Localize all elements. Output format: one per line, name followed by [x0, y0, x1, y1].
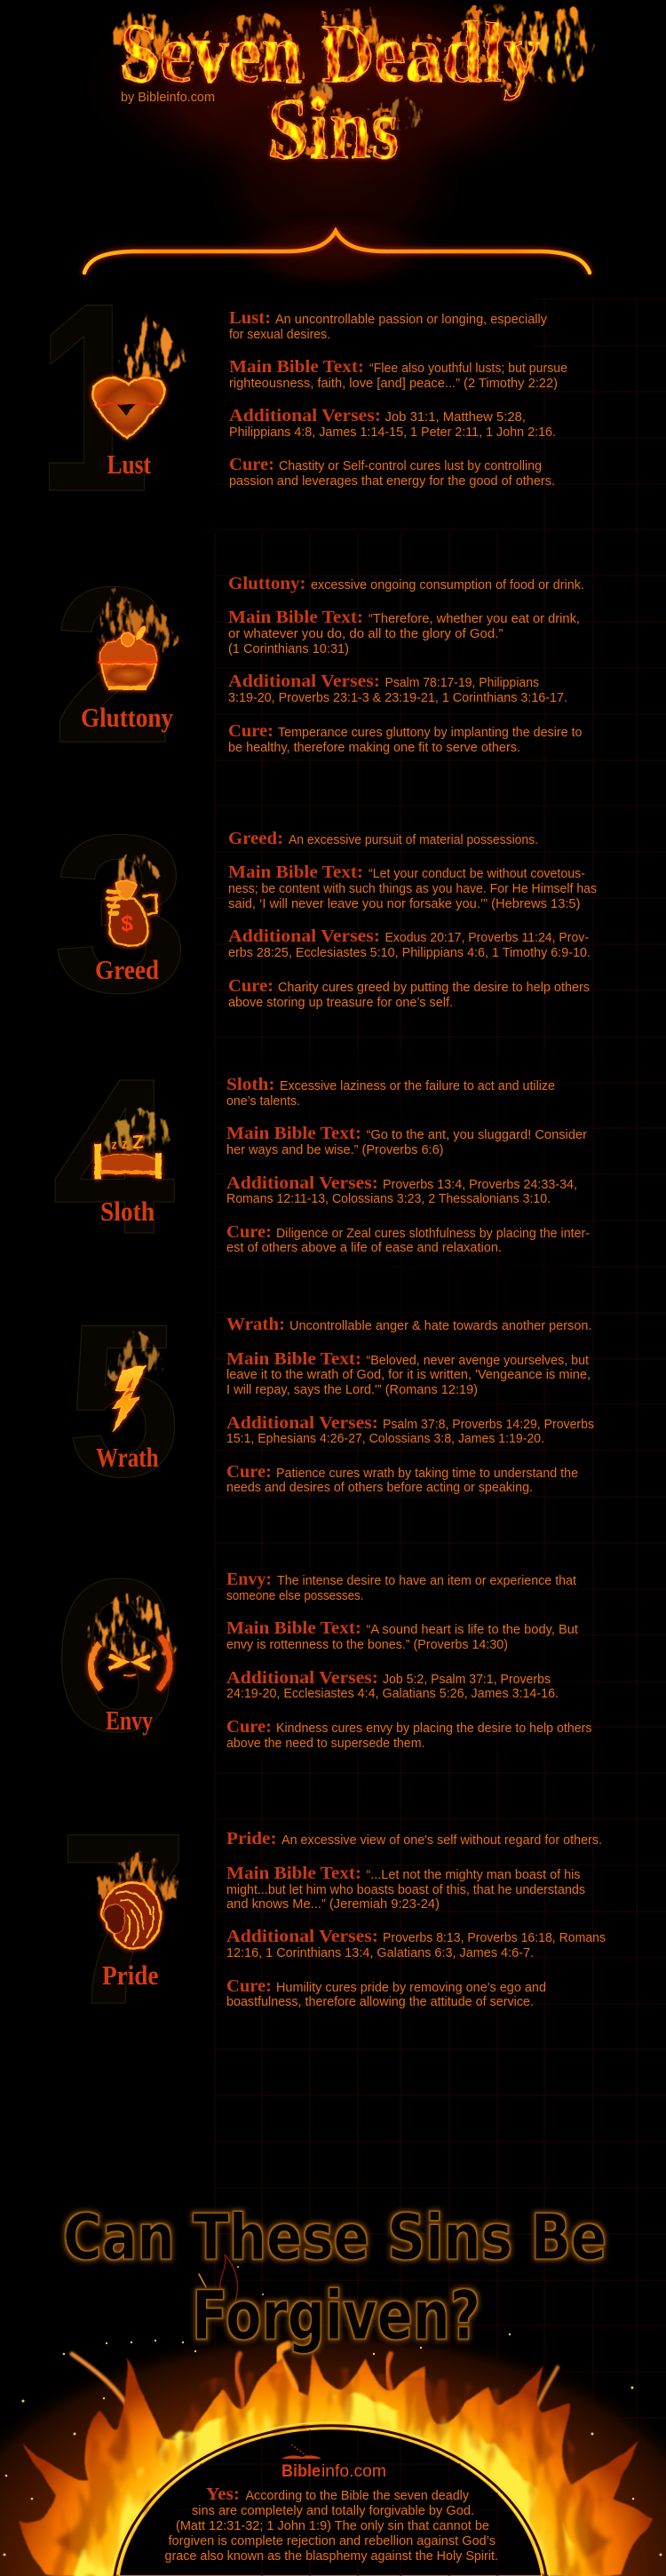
- icon: flaming bed: z: [122, 1137, 128, 1152]
- title line 2: Sins: [267, 79, 400, 178]
- panel: lust: [36, 247, 567, 548]
- panel: envy: [53, 1534, 592, 1777]
- text block: main bible text: Main Bible Text:: [229, 357, 364, 377]
- number 6: 6: [53, 1534, 178, 1777]
- text block: additional verses: Job 5:2, Psalm 37:1, Proverbs: [383, 1672, 551, 1687]
- logo: Bibleinfo.com: info.com: [321, 2462, 386, 2481]
- text block: additional verses: Exodus 20:17, Proverbs 11:24, Prov-: [385, 930, 589, 945]
- text block: definition: Pride:: [226, 1829, 277, 1849]
- text block: definition: [226, 1570, 577, 1603]
- panel: gluttony: [52, 540, 584, 789]
- title: Seven Deadly Sins: [114, 4, 591, 178]
- heading: Can These Sins Be Forgiven?: [63, 2201, 607, 2355]
- number 3: 3: [52, 789, 189, 1039]
- text block: additional verses: [226, 1173, 577, 1206]
- text block: answer: According to the Bible the seven deadly: [245, 2488, 469, 2503]
- text block: cure: be healthy, therefore making one fit to serve others.: [228, 740, 520, 755]
- text block: main bible text: and knows Me...” (Jeremiah 9:23-24): [226, 1896, 440, 1912]
- text block: answer: sins are completely and totally forgivable by God.: [192, 2503, 474, 2518]
- text block: additional verses: 3:19-20, Proverbs 23:1-3 & 23:19-21, 1 Corinthians 3:16-17.: [228, 690, 567, 705]
- panel: pride: [58, 1784, 606, 2055]
- text block: main bible text: [226, 1618, 579, 1652]
- text block: additional verses: Additional Verses:: [228, 926, 380, 946]
- text block: additional verses: [226, 1927, 606, 1960]
- text block: additional verses: Psalm 78:17-19, Philippians: [385, 675, 539, 690]
- text block: main bible text: “Let your conduct be without covetous-: [369, 866, 585, 881]
- text block: additional verses: Romans 12:11-13, Colossians 3:23, 2 Thessalonians 3:10.: [226, 1191, 551, 1206]
- text block: cure: Cure:: [226, 1976, 272, 1996]
- text block: definition: [228, 829, 538, 848]
- text block: cure: Charity cures greed by putting the desire to help others: [278, 980, 590, 995]
- text block: main bible text: her ways and be wise.” (Proverbs 6:6): [226, 1142, 444, 1157]
- number 5: 5: [67, 1279, 180, 1523]
- icon: flaming bed: [94, 1101, 170, 1179]
- text block: definition: someone else possesses.: [226, 1588, 364, 1603]
- flame wisps above the arch: [72, 2254, 558, 2425]
- icon: flaming cupcake: [99, 588, 176, 690]
- text block: answer: (Matt 12:31-32; 1 John 1:9) The only sin that cannot be: [176, 2518, 489, 2533]
- text block: definition: Uncontrollable anger & hate towards another person.: [289, 1318, 591, 1333]
- sin name: Pride: [102, 1960, 158, 1991]
- text block: definition: [226, 1315, 591, 1334]
- text block: main bible text: Main Bible Text:: [226, 1349, 361, 1369]
- title line 1: Seven Deadly: [119, 5, 540, 101]
- icon: flaming money bag: [108, 848, 162, 945]
- number 1: 1: [36, 247, 150, 548]
- text block: definition: Lust:: [229, 308, 271, 328]
- text block: main bible text: said, ‘I will never leave you nor forsake you.’” (Hebrews 13:5): [228, 896, 581, 911]
- text block: answer: forgiven is complete rejection and rebellion against God’s: [169, 2533, 496, 2548]
- byline: by Bibleinfo.com: [121, 90, 215, 105]
- text block: main bible text: [226, 1864, 585, 1912]
- text block: definition: one’s talents.: [226, 1093, 300, 1109]
- text block: additional verses: [226, 1413, 594, 1446]
- text block: main bible text: Main Bible Text:: [228, 863, 363, 882]
- panel: wrath: [67, 1279, 594, 1523]
- logo: Bibleinfo.com: [281, 2445, 386, 2481]
- text block: definition: Greed:: [228, 829, 283, 848]
- text block: definition: An excessive pursuit of material possessions.: [289, 832, 538, 847]
- sin name: Wrath: [96, 1442, 158, 1473]
- text block: additional verses: 12:16, 1 Corinthians 13:4, Galatians 6:3, James 4:6-7.: [226, 1945, 534, 1960]
- text block: main bible text: “Beloved, never avenge yourselves, but: [366, 1353, 590, 1368]
- icon: flaming lightning bolt: [107, 1332, 166, 1432]
- sin name: Gluttony: [81, 702, 173, 733]
- text block: definition: Gluttony:: [228, 574, 305, 593]
- text block: additional verses: Additional Verses:: [226, 1413, 378, 1433]
- text block: main bible text: righteousness, faith, love [and] peace...” (2 Timothy 2:22): [229, 376, 558, 391]
- text block: cure: above storing up treasure for one’s self.: [228, 995, 453, 1010]
- dark flame gaps: [53, 2398, 613, 2558]
- panel: sloth: [52, 1032, 590, 1280]
- text block: cure: Temperance cures gluttony by implanting the desire to: [278, 725, 583, 740]
- number 4: 4: [52, 1032, 176, 1280]
- icon: flaming heart: [92, 315, 185, 438]
- text block: definition: Wrath:: [226, 1315, 285, 1334]
- text block: main bible text: Main Bible Text:: [226, 1864, 361, 1883]
- text block: additional verses: [228, 672, 567, 705]
- text block: main bible text: [228, 863, 597, 911]
- text block: main bible text: or whatever you do, do all to the glory of God.”: [228, 626, 503, 641]
- text block: answer: grace also known as the blasphemy against the Holy Spirit.: [165, 2548, 498, 2564]
- text block: additional verses: erbs 28:25, Ecclesiastes 5:10, Philippians 4:6, 1 Timothy 6:9-10.: [228, 945, 591, 960]
- text block: cure: Cure:: [226, 1717, 272, 1737]
- text block: additional verses: Proverbs 8:13, Proverbs 16:18, Romans: [383, 1930, 606, 1945]
- text block: cure: Cure:: [228, 976, 274, 996]
- text block: cure: Chastity or Self-control cures lust by controlling: [279, 458, 542, 473]
- sin name: Lust: [107, 449, 152, 480]
- background fire glow: [0, 2318, 666, 2576]
- number 7: 7: [58, 1784, 189, 2055]
- text block: additional verses: [228, 926, 591, 960]
- text block: main bible text: Main Bible Text:: [226, 1618, 361, 1638]
- text block: cure: [228, 976, 590, 1010]
- text block: additional verses: Job 31:1, Matthew 5:28,: [385, 409, 526, 425]
- background: faint red grid: [211, 299, 666, 2576]
- text block: additional verses: 24:19-20, Ecclesiastes 4:4, Galatians 5:26, James 3:14-16.: [226, 1686, 559, 1701]
- panel: greed: [52, 789, 597, 1039]
- text block: additional verses: Proverbs 13:4, Proverbs 24:33-34,: [383, 1177, 577, 1192]
- icon: flaming bed: z: [111, 1138, 117, 1151]
- heading: Can These Sins Be Forgiven?: Forgiven?: [192, 2276, 480, 2355]
- text block: main bible text: envy is rottenness to the bones.” (Proverbs 14:30): [226, 1637, 508, 1652]
- text block: definition: An excessive view of one's self without regard for others.: [281, 1833, 602, 1848]
- darker flame mottling: [44, 2372, 622, 2576]
- sin name: Greed: [95, 954, 159, 985]
- logo: Bibleinfo.com: Bible: [281, 2462, 321, 2481]
- text block: definition: Envy:: [226, 1570, 272, 1589]
- text block: main bible text: Main Bible Text:: [226, 1124, 361, 1143]
- text block: definition: [226, 1829, 602, 1849]
- text block: cure: Cure:: [226, 1222, 272, 1242]
- text block: cure: [229, 455, 555, 489]
- text block: cure: passion and leverages that energy for the good of others.: [229, 473, 555, 489]
- text block: cure: Humility cures pride by removing one's ego and: [276, 1980, 546, 1995]
- text block: additional verses: [226, 1668, 559, 1701]
- text block: main bible text: Main Bible Text:: [228, 608, 363, 627]
- icon: flaming envious face: [89, 1590, 178, 1690]
- text block: additional verses: 15:1, Ephesians 4:26-27, Colossians 3:8, James 1:19-20.: [226, 1431, 544, 1446]
- text block: main bible text: [228, 608, 580, 656]
- text block: definition: for sexual desires.: [229, 327, 330, 342]
- text block: cure: above the need to supersede them.: [226, 1736, 424, 1751]
- text block: answer: Yes:: [206, 2485, 240, 2504]
- text block: main bible text: might...but let him who boasts boast of this, that he understands: [226, 1882, 585, 1897]
- text block: main bible text: ness; be content with such things as you have. For He Himself has: [228, 881, 597, 896]
- text block: cure: Cure:: [226, 1462, 272, 1482]
- text block: cure: [226, 1717, 591, 1751]
- text block: additional verses: Philippians 4:8, James 1:14-15, 1 Peter 2:11, 1 John 2:16.: [229, 425, 556, 440]
- text block: cure: est of others above a life of ease and relaxation.: [226, 1240, 502, 1255]
- main flame mass: [18, 2351, 650, 2576]
- background: title red glow: [67, 0, 599, 293]
- text block: answer: [165, 2485, 498, 2564]
- text block: main bible text: leave it to the wrath of God, for it is written, 'Vengeance is mine,: [226, 1367, 591, 1382]
- text block: additional verses: Psalm 37:8, Proverbs 14:29, Proverbs: [383, 1417, 594, 1432]
- text block: main bible text: “Therefore, whether you eat or drink,: [369, 611, 580, 626]
- text block: additional verses: [229, 406, 556, 440]
- panel: fire arch footer: [0, 2254, 666, 2576]
- icon: flaming bed: Z: [132, 1133, 144, 1153]
- text block: cure: [226, 1222, 590, 1255]
- decorative curly bracket: [84, 231, 590, 273]
- flame highlight streaks: [79, 2397, 582, 2576]
- text block: definition: Sloth:: [226, 1075, 275, 1094]
- text block: cure: [228, 721, 583, 755]
- text block: main bible text: “...Let not the mighty man boast of his: [366, 1867, 581, 1882]
- text block: main bible text: “Go to the ant, you sluggard! Consider: [366, 1127, 587, 1142]
- text block: definition: [226, 1075, 555, 1109]
- text block: main bible text: [226, 1124, 587, 1157]
- icon: flaming money bag: $: [121, 911, 133, 936]
- text block: cure: [226, 1462, 578, 1495]
- text block: cure: boastfulness, therefore allowing the attitude of service.: [226, 1994, 534, 2009]
- sin name: Sloth: [100, 1196, 155, 1227]
- text block: definition: [229, 308, 547, 342]
- text block: cure: [226, 1976, 546, 2009]
- text block: additional verses: Additional Verses:: [226, 1927, 378, 1946]
- text block: definition: The intense desire to have an item or experience that: [277, 1573, 577, 1588]
- text block: additional verses: Additional Verses:: [226, 1668, 378, 1688]
- title flames: [114, 4, 591, 130]
- text block: cure: needs and desires of others before acting or speaking.: [226, 1480, 533, 1495]
- text block: cure: Kindness cures envy by placing the desire to help others: [276, 1721, 591, 1736]
- text block: definition: An uncontrollable passion or longing, especially: [275, 312, 547, 327]
- text block: definition: excessive ongoing consumption of food or drink.: [311, 577, 584, 592]
- text block: main bible text: [229, 357, 567, 391]
- sin name: Envy: [106, 1705, 153, 1736]
- text block: cure: Patience cures wrath by taking time to understand the: [276, 1466, 578, 1481]
- sparks: [4, 2266, 662, 2556]
- text block: main bible text: “A sound heart is life to the body, But: [366, 1622, 579, 1637]
- text block: cure: Diligence or Zeal cures slothfulness by placing the inter-: [276, 1226, 590, 1241]
- text block: additional verses: Additional Verses:: [228, 672, 380, 691]
- text block: definition: [228, 574, 584, 593]
- text block: definition: Excessive laziness or the failure to act and utilize: [280, 1078, 555, 1093]
- icon: flaming lion head: [84, 1852, 179, 1949]
- text block: cure: Cure:: [228, 721, 274, 741]
- text block: cure: Cure:: [229, 455, 274, 474]
- text block: additional verses: Additional Verses:: [229, 406, 381, 425]
- arch rings and black centre: [110, 2421, 551, 2576]
- number 2: 2: [52, 540, 174, 789]
- text block: main bible text: (1 Corinthians 10:31): [228, 641, 349, 656]
- text block: main bible text: I will repay, says the Lord.'” (Romans 12:19): [226, 1382, 478, 1397]
- text block: additional verses: Additional Verses:: [226, 1173, 378, 1193]
- text block: main bible text: [226, 1349, 591, 1397]
- text block: main bible text: “Flee also youthful lusts; but pursue: [369, 361, 567, 376]
